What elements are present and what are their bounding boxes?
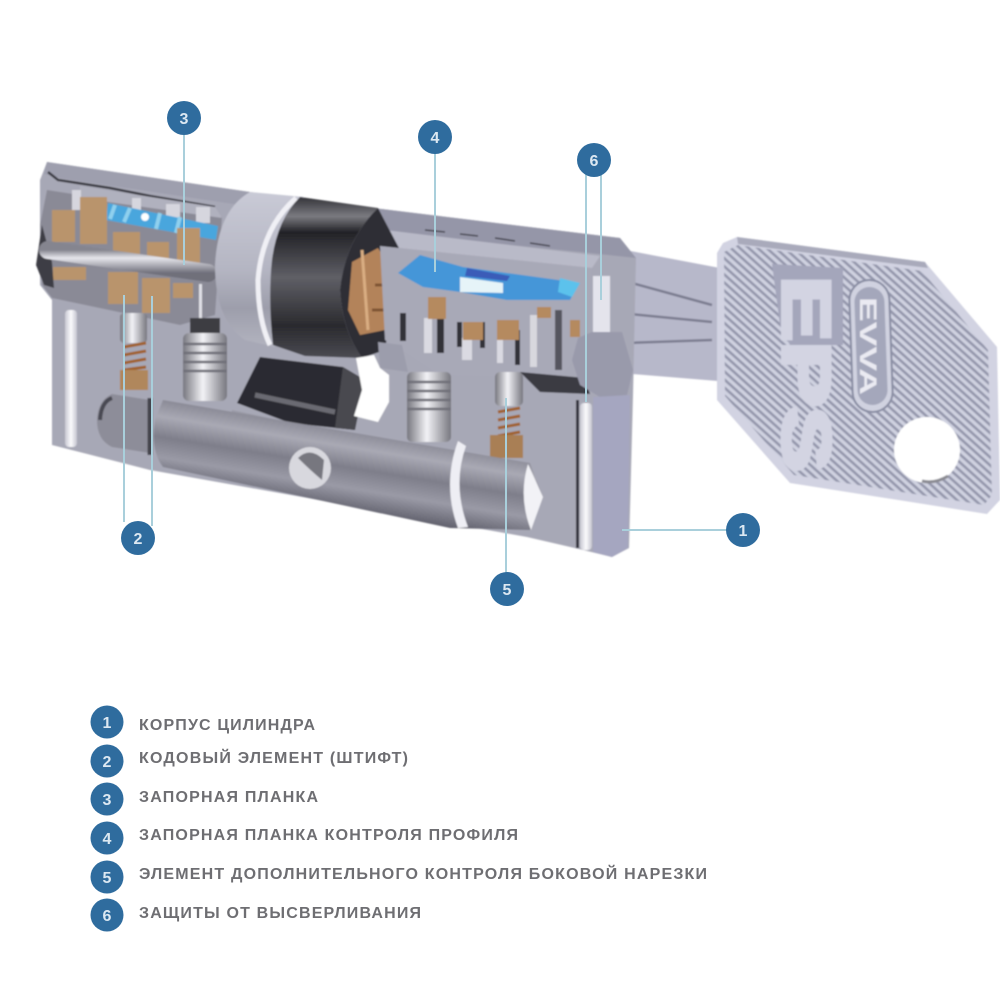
legend item 5: 5 <box>103 870 112 887</box>
collar at key side <box>572 332 633 397</box>
chrome ring of rotor <box>215 192 304 347</box>
callout marker 4: 4 <box>431 130 440 147</box>
left white drill-guard pin <box>65 310 77 447</box>
cylinder housing body <box>40 162 636 557</box>
key with EVVA EPS head: EPS <box>768 276 844 472</box>
callout marker 3: 3 <box>180 111 189 128</box>
legend <box>90 706 707 932</box>
callout marker 6 <box>577 143 611 177</box>
callout marker 1 <box>726 513 760 547</box>
legend item 5 <box>90 860 707 894</box>
callout marker 3 <box>167 101 201 135</box>
legend item 1 <box>90 706 315 738</box>
callout marker 2 <box>121 521 155 555</box>
key with EVVA EPS head: EVVA <box>854 297 881 395</box>
legend item 3 <box>90 782 318 816</box>
blue profile locking bar <box>398 255 580 300</box>
callout marker 5 <box>490 572 524 606</box>
black rotor sleeve <box>270 197 378 358</box>
key with EVVA EPS head <box>610 237 1000 514</box>
legend item 2: 2 <box>103 754 112 771</box>
legend item 5: ЭЛЕМЕНТ ДОПОЛНИТЕЛЬНОГО КОНТРОЛЯ БОКОВОЙ НАРЕЗКИ <box>139 864 707 883</box>
callout marker 5: 5 <box>503 582 512 599</box>
right spring pin assembly <box>490 372 523 458</box>
callout marker 1: 1 <box>739 523 748 540</box>
legend item 2 <box>90 744 408 778</box>
legend item 2: КОДОВЫЙ ЭЛЕМЕНТ (ШТИФТ) <box>139 748 408 767</box>
lock cylinder illustration <box>36 162 1000 557</box>
blue locking bar <box>106 203 218 240</box>
legend item 1: 1 <box>103 715 112 732</box>
legend item 4 <box>90 822 518 854</box>
legend item 4: ЗАПОРНАЯ ПЛАНКА КОНТРОЛЯ ПРОФИЛЯ <box>139 827 518 844</box>
right chamber <box>378 246 592 394</box>
legend item 4: 4 <box>103 831 112 848</box>
legend item 3: ЗАПОРНАЯ ПЛАНКА <box>139 789 318 806</box>
right body front column <box>593 395 630 557</box>
left chamber with code pins <box>36 186 222 338</box>
legend item 6: ЗАЩИТЫ ОТ ВЫСВЕРЛИВАНИЯ <box>139 905 421 922</box>
white cut-out <box>354 355 389 422</box>
legend item 1: КОРПУС ЦИЛИНДРА <box>139 717 315 734</box>
legend item 6 <box>90 898 421 932</box>
brass pins <box>52 197 200 313</box>
callout marker 2: 2 <box>134 531 143 548</box>
dark line and white drill-guard pins <box>576 276 610 550</box>
rotor face with brass <box>340 208 402 358</box>
lower shaft <box>97 394 543 530</box>
right threaded silver pin <box>407 372 451 442</box>
black cam <box>230 357 365 432</box>
horizontal steel rod <box>48 250 208 273</box>
brass pins right <box>428 297 580 340</box>
callout marker 6: 6 <box>590 153 599 170</box>
left threaded silver pin <box>183 333 227 401</box>
callout lines <box>124 135 727 574</box>
legend item 3: 3 <box>103 792 112 809</box>
legend item 6: 6 <box>103 908 112 925</box>
left spring pin assembly <box>120 313 148 390</box>
callout marker 4 <box>418 120 452 154</box>
